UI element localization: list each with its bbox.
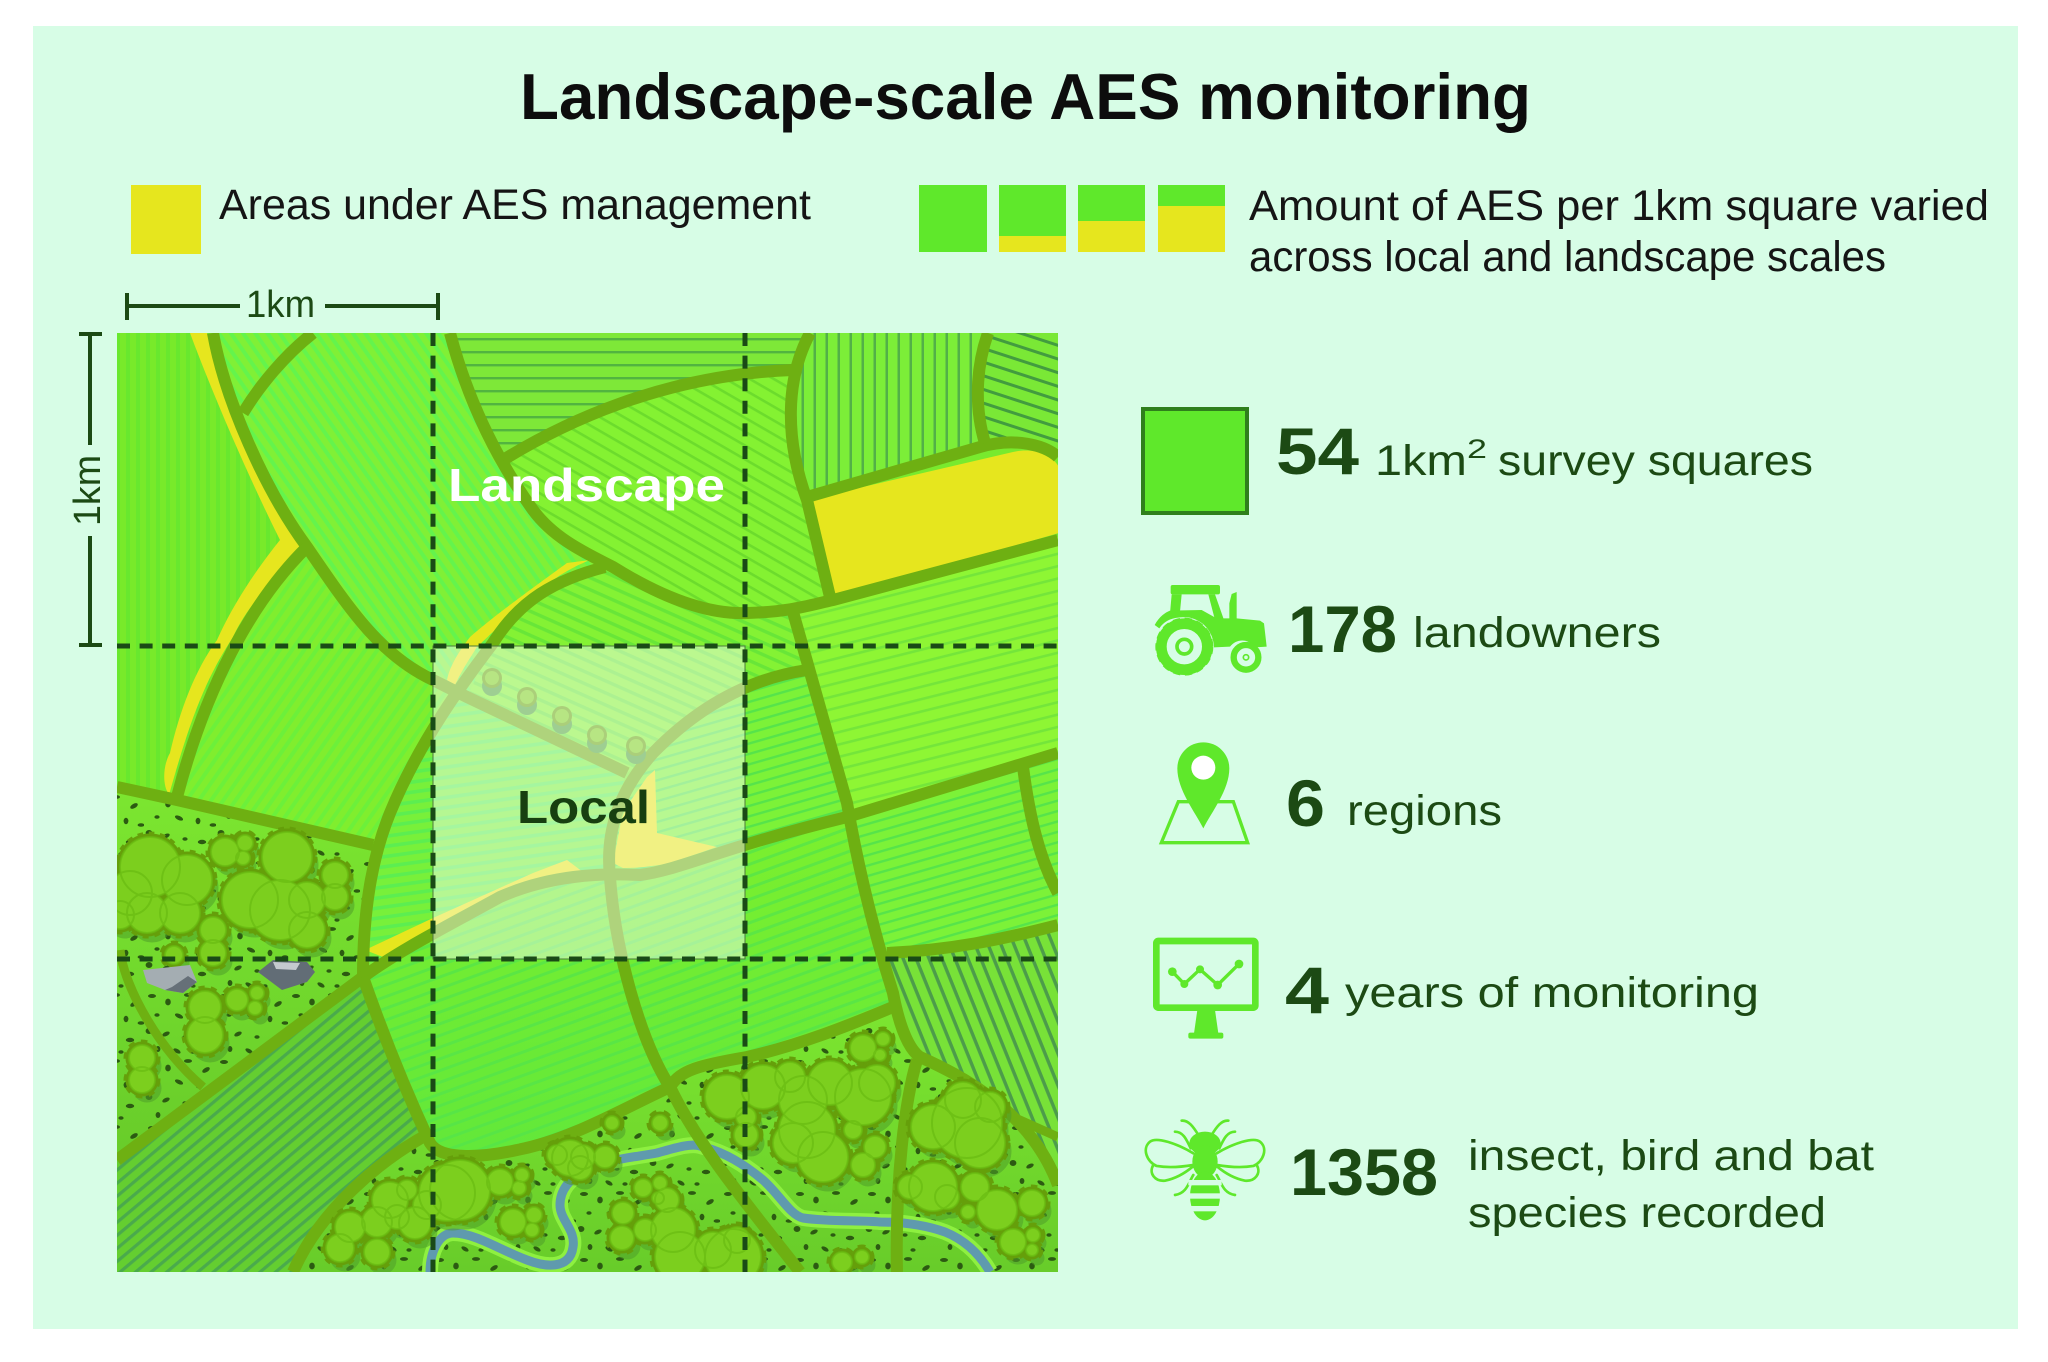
local scale highlight square: [433, 646, 745, 959]
hedgerow trees: [482, 668, 646, 764]
river: [430, 1145, 990, 1272]
legend: amount of AES per square: Amount of AES per 1km square varied: [1249, 182, 1989, 230]
icon: map pin: [1161, 742, 1248, 843]
icon: bee: [1146, 1121, 1264, 1220]
legend: areas under AES management: [131, 181, 811, 254]
rocks: [143, 960, 315, 993]
stat: landowners: landowners: [1413, 609, 1661, 657]
stat: years of monitoring: [1156, 941, 1759, 1039]
stat: species recorded: [1146, 1121, 1874, 1237]
farm tracks: [117, 333, 1058, 1272]
stat: species recorded: species recorded: [1468, 1189, 1826, 1237]
icon: tractor: [1155, 585, 1267, 675]
stat: years of monitoring: 4: [1285, 953, 1329, 1027]
stat: survey squares: [1143, 409, 1813, 513]
vertical 1km scale: [67, 334, 109, 645]
horizontal 1km scale: 1km: [246, 284, 315, 326]
legend: amount of AES per square: across local and landscape scales: [1249, 233, 1886, 281]
stat: landowners: [1155, 585, 1661, 675]
horizontal 1km scale: [127, 284, 438, 326]
stat: regions: [1161, 742, 1502, 843]
stat: survey squares: 1km: [1375, 437, 1467, 485]
vertical 1km scale: 1km: [67, 455, 109, 526]
label: Local: Local: [517, 781, 650, 833]
icon: green square: [1143, 409, 1247, 513]
woodland ground: [117, 787, 1058, 1272]
stat: regions: 6: [1286, 766, 1325, 840]
title: Landscape-scale AES monitoring: [520, 60, 1531, 133]
stat: survey squares: 54: [1276, 414, 1359, 488]
stat: years of monitoring: years of monitoring: [1345, 969, 1759, 1017]
stat: regions: regions: [1347, 787, 1502, 835]
AES yellow strips: [164, 333, 1059, 957]
stat: survey squares: survey squares: [1498, 437, 1813, 485]
legend: amount of AES per square: [919, 182, 1989, 281]
landscape map: [106, 333, 1059, 1293]
stat: survey squares: 2: [1467, 434, 1487, 464]
icon: monitor with chart: [1156, 941, 1255, 1039]
field patches: [117, 333, 1058, 1272]
stat: species recorded: 1358: [1290, 1135, 1438, 1209]
legend: areas under AES management: Areas under AES management: [219, 181, 811, 229]
trees: [106, 832, 1050, 1293]
stat: landowners: 178: [1288, 592, 1397, 666]
landscape grid dashes: [117, 333, 1058, 1272]
stat: species recorded: insect, bird and bat: [1468, 1132, 1874, 1180]
label: Landscape: Landscape: [448, 459, 725, 511]
